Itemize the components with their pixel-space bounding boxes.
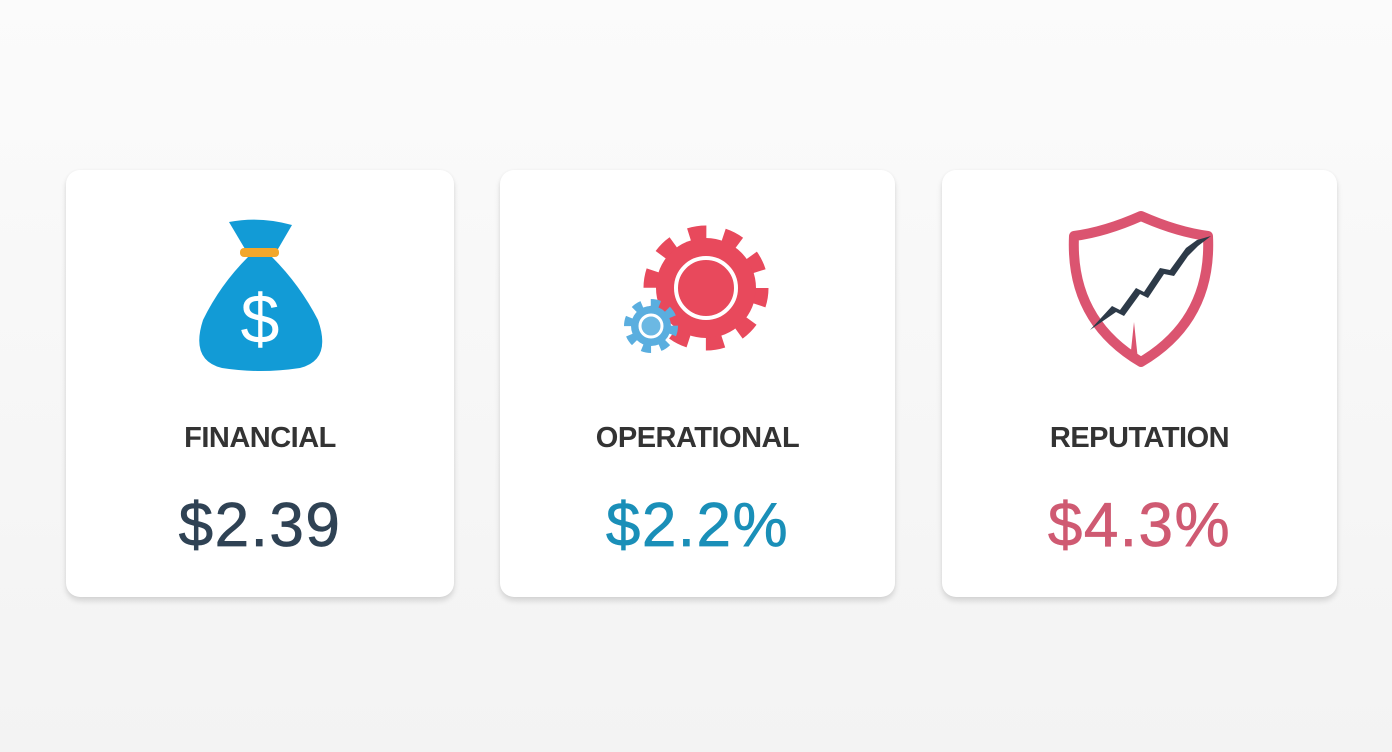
panel: operational bbox=[500, 170, 895, 597]
icon: money bag: $ bbox=[241, 280, 279, 358]
heading: financial: FINANCIAL bbox=[184, 422, 336, 454]
value: reputation: $4.3% bbox=[1048, 491, 1231, 560]
value: operational: $2.2% bbox=[606, 491, 789, 560]
heading: operational: OPERATIONAL bbox=[596, 422, 799, 454]
value: financial: $2.39 bbox=[179, 491, 341, 560]
panel: reputation bbox=[942, 170, 1337, 597]
heading: reputation: REPUTATION bbox=[1050, 422, 1229, 454]
panel: financial bbox=[66, 170, 454, 597]
